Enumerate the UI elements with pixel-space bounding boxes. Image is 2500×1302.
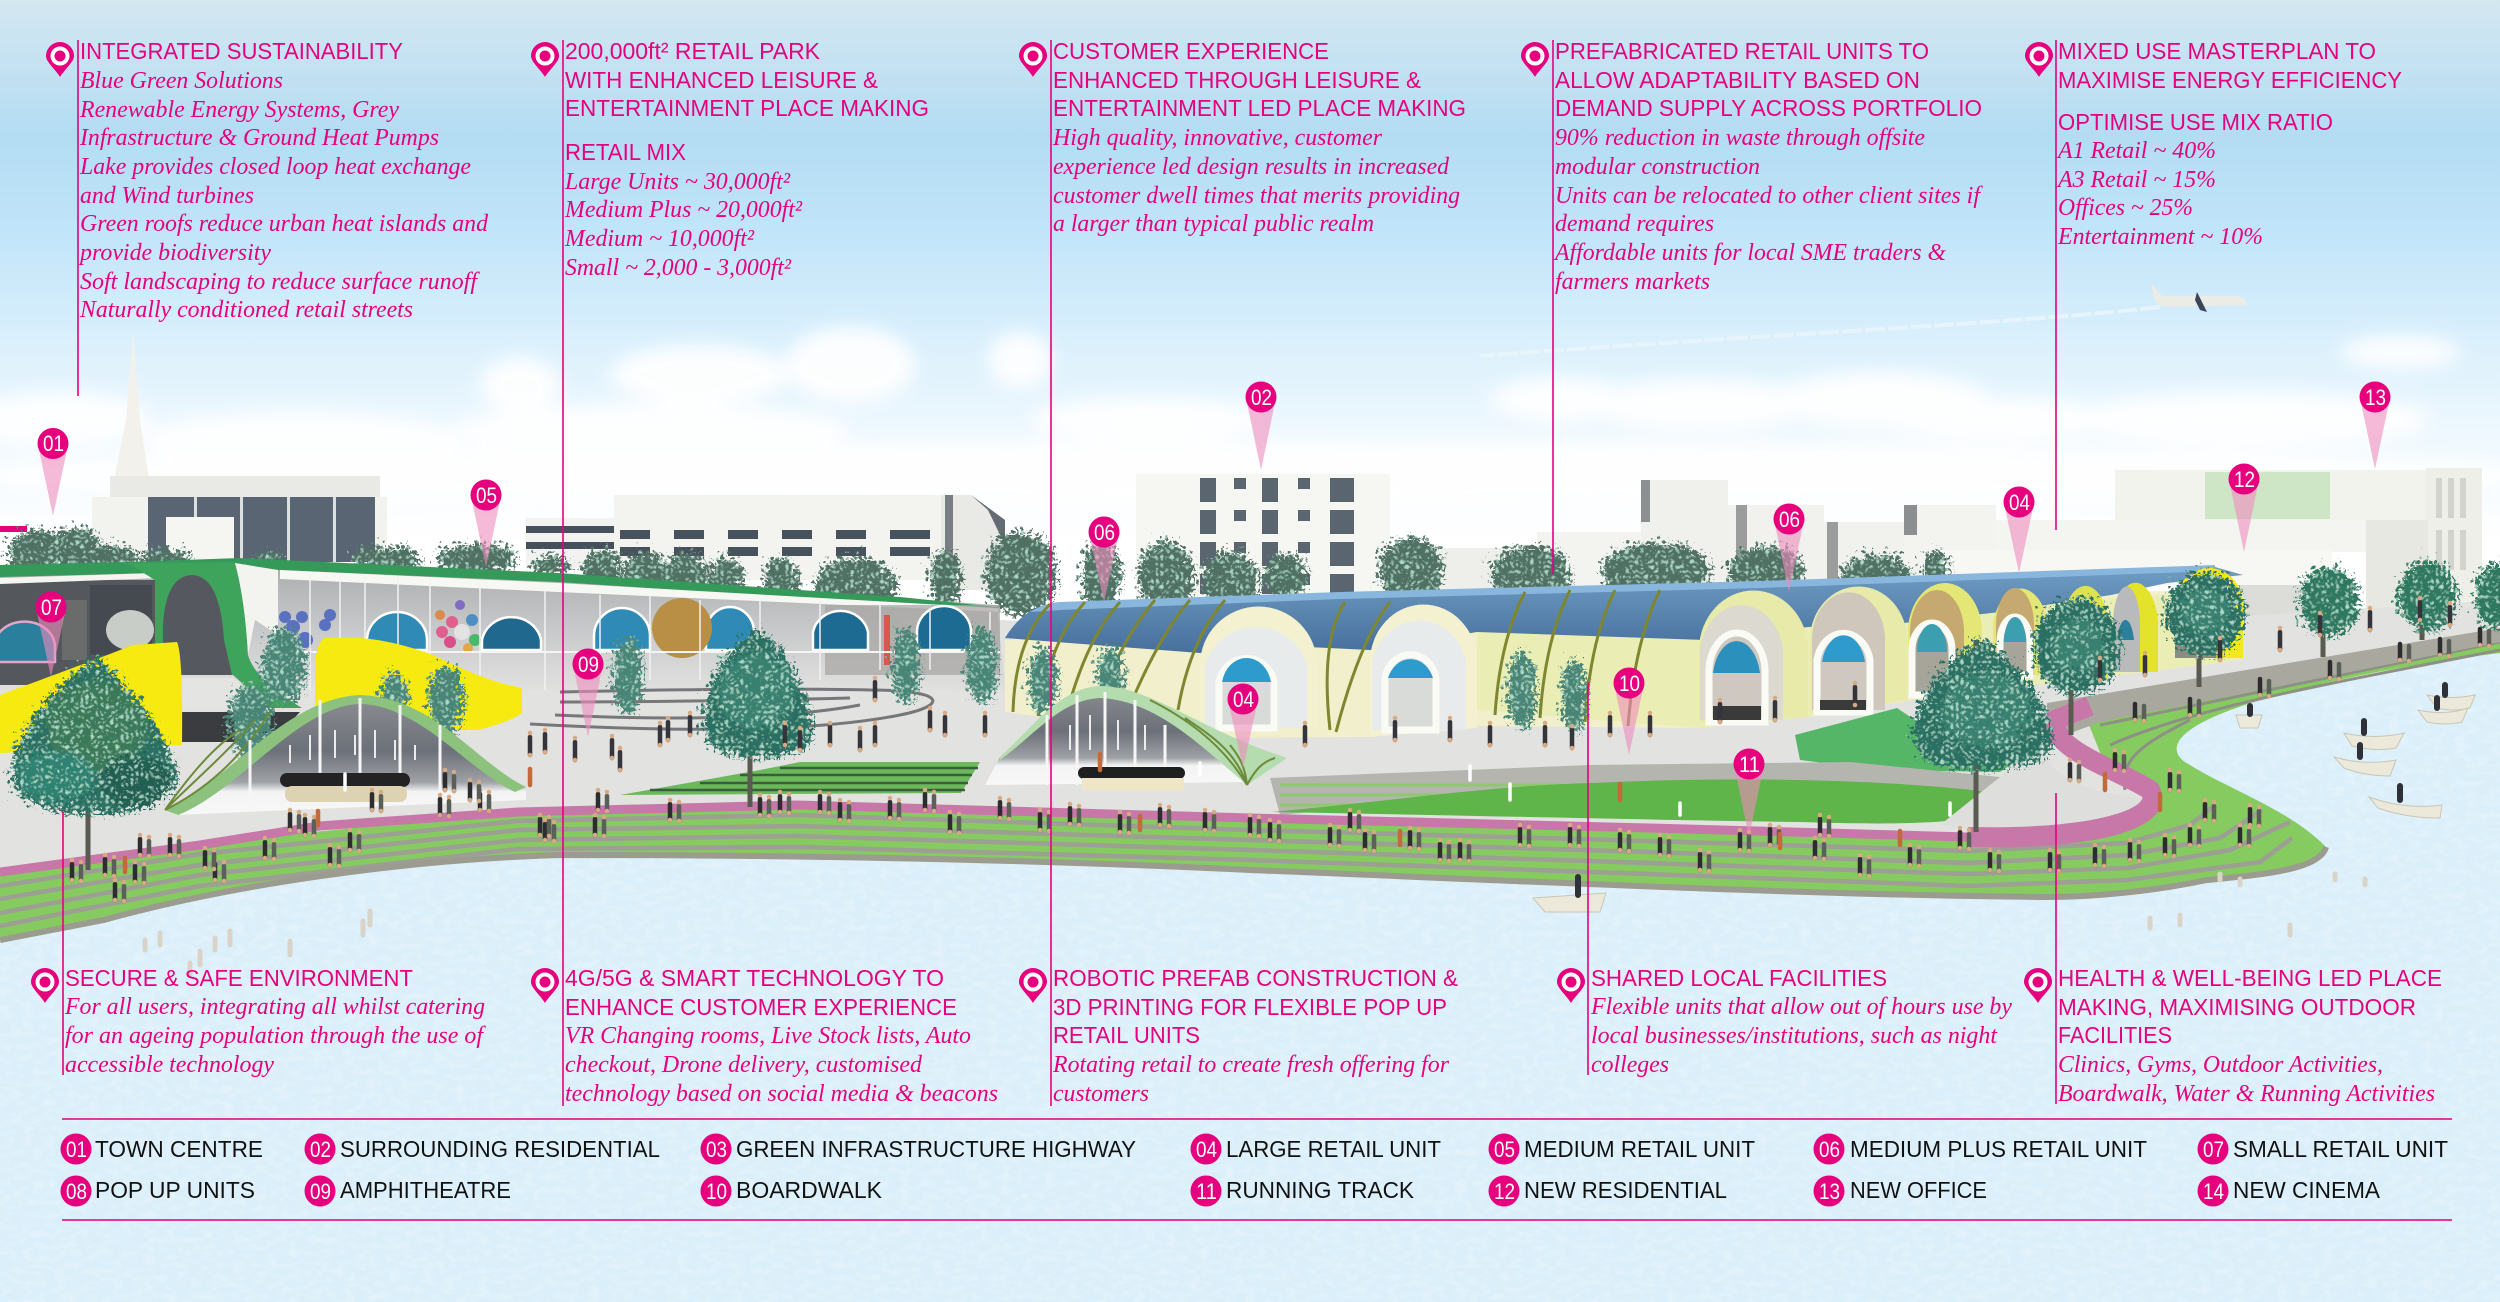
legend item 12 [1488,1176,1727,1206]
text block: Infrastructure & Ground Heat Pumps [79,125,439,151]
icon: location pin [1019,42,1047,77]
heading: ENHANCED THROUGH LEISURE & [1053,67,1421,93]
boats [1533,685,2475,912]
panel: mixed use masterplan [2025,38,2402,250]
map pin 07: 07 [41,595,62,620]
airplane and contrail [1480,284,2247,356]
legend item 08 [60,1176,255,1206]
legend item 06: 06 [1819,1137,1840,1162]
heading: MIXED USE MASTERPLAN TO [2058,38,2376,64]
text block [1052,125,1460,237]
panel: secure and safe environment [31,965,486,1078]
heading: MAXIMISE ENERGY EFFICIENCY [2058,67,2402,93]
clouds [0,327,2500,509]
legend item 09: 09 [310,1179,331,1204]
text block: Rotating retail to create fresh offering for [1052,1052,1450,1078]
legend item 13 [1814,1176,1987,1206]
text block [1052,1052,1450,1107]
heading: ALLOW ADAPTABILITY BASED ON [1555,67,1920,93]
boardwalk retaining wall [1270,762,2010,815]
map pin 02: 02 [1251,385,1272,410]
heading [565,965,957,1020]
text block: modular construction [1555,154,1760,180]
text block: local businesses/institutions, such as night [1591,1023,1998,1049]
text block: Medium Plus ~ 20,000ft² [564,197,803,223]
text block: Offices ~ 25% [2058,195,2193,221]
legend item 01 [60,1134,263,1164]
text block: provide biodiversity [78,240,271,266]
hall shopfront blue arches [1219,617,2030,730]
panel: shared local facilities [1557,965,2012,1078]
heading: MAKING, MAXIMISING OUTDOOR [2058,994,2416,1020]
legend item 05: 05 [1494,1137,1515,1162]
pavilion, right [985,686,1287,790]
heading: PREFABRICATED RETAIL UNITS TO [1555,38,1929,64]
legend item 11: RUNNING TRACK [1226,1177,1415,1203]
ramp green roof [1795,708,2040,772]
text block: Units can be relocated to other client sites if [1555,183,1983,209]
background buildings, tall residential block [1136,474,1390,604]
subheading: OPTIMISE USE MIX RATIO [2058,109,2333,135]
heading: FACILITIES [2058,1022,2172,1048]
map pin 07 [36,592,66,677]
background buildings, right [1400,468,2482,665]
legend item 09: AMPHITHEATRE [340,1177,511,1203]
vertical leader lines [63,40,2056,1106]
text block: For all users, integrating all whilst catering [64,994,485,1020]
map pin 06 right [1774,504,1804,592]
text block: customer dwell times that merits providing [1053,183,1460,209]
heading: ENHANCE CUSTOMER EXPERIENCE [565,994,957,1020]
text block: Soft landscaping to reduce surface runoff [80,269,480,295]
map pin 06 right: 06 [1779,507,1800,532]
heading: DEMAND SUPPLY ACROSS PORTFOLIO [1555,95,1982,121]
map pin 09 [572,648,604,737]
icon: location pin [531,42,559,77]
icon: location pin [46,42,74,77]
panel: integrated sustainability [46,38,489,323]
legend item 02: 02 [310,1137,331,1162]
text block: Entertainment ~ 10% [2057,224,2263,250]
panel: health and well-being [2024,965,2442,1107]
amphitheatre curved seating [530,689,933,729]
map pin 05: 05 [476,483,497,508]
heading: 3D PRINTING FOR FLEXIBLE POP UP [1053,994,1447,1020]
panel: robotic prefab construction [1019,965,1458,1107]
map pin 06 left [1088,516,1120,602]
text block: farmers markets [1555,269,1710,295]
text block [1553,125,1983,295]
glazing mullions [310,575,990,690]
map pin 13: 13 [2365,385,2386,410]
text block: Renewable Energy Systems, Grey [79,97,399,123]
map pin 04 lower [1228,684,1258,768]
text block: checkout, Drone delivery, customised [565,1052,923,1078]
heading: 4G/5G & SMART TECHNOLOGY TO [565,965,944,991]
panel: prefabricated units [1521,38,1983,295]
text block: Green roofs reduce urban heat islands and [80,211,489,237]
heading: RETAIL UNITS [1053,1022,1200,1048]
text block [1590,994,2012,1078]
legend item 13: NEW OFFICE [1850,1177,1987,1203]
text block: technology based on social media & beacons [565,1081,998,1107]
small plaza trees [223,622,1581,753]
legend item 11 [1190,1176,1415,1206]
map pin 01: 01 [43,431,64,456]
green terraced lake steps [0,640,2500,940]
hall walls [1005,590,2243,738]
text block: Large Units ~ 30,000ft² [564,169,791,195]
text block: VR Changing rooms, Live Stock lists, Auto [565,1023,971,1049]
text block: for an ageing population through the use of [65,1023,486,1049]
text block [2058,1052,2435,1107]
heading: ROBOTIC PREFAB CONSTRUCTION & [1053,965,1458,991]
foreground trees [5,555,2500,870]
yellow mound, right [315,638,522,730]
map pin 13 [2360,382,2390,469]
legend item 03: 03 [706,1137,727,1162]
legend item 14: NEW CINEMA [2233,1177,2381,1203]
legend item 10: 10 [706,1179,727,1204]
legend item 10: BOARDWALK [736,1177,883,1203]
background buildings, left [0,332,1005,590]
legend item 12: NEW RESIDENTIAL [1524,1177,1727,1203]
running track [0,706,2152,872]
legend item 04: LARGE RETAIL UNIT [1226,1136,1441,1162]
central green terrace steps [620,762,980,795]
text block [564,169,803,281]
heading: SHARED LOCAL FACILITIES [1591,965,1887,991]
hall roofs [1005,567,2243,653]
green archway [127,562,302,742]
icon: location pin [2024,968,2052,1003]
text block: and Wind turbines [80,183,254,209]
panel: smart technology [531,965,998,1107]
map pin 05 [470,480,502,567]
shopfront arches [0,606,971,662]
heading: HEALTH & WELL-BEING LED PLACE [2058,965,2442,991]
heading: WITH ENHANCED LEISURE & [565,67,878,93]
promenade wall [2047,628,2500,742]
text block: Affordable units for local SME traders & [1553,240,1946,266]
text block: Blue Green Solutions [80,68,283,94]
legend item 01: TOWN CENTRE [95,1136,263,1162]
pavilion, left [165,695,526,815]
icon: location pin [1557,968,1585,1003]
heading [1053,965,1458,1048]
heading: ENTERTAINMENT LED PLACE MAKING [1053,95,1466,121]
left retail building [0,558,1005,690]
text block [2056,138,2263,250]
legend item 07: SMALL RETAIL UNIT [2233,1136,2448,1162]
map pin 12: 12 [2234,467,2255,492]
text block: accessible technology [65,1052,274,1078]
panel: retail park [531,38,929,281]
map pin 01 [38,428,68,516]
text block [78,68,489,323]
legend item 11: 11 [1196,1179,1217,1204]
legend item 08: POP UP UNITS [95,1177,255,1203]
map pin 06 left: 06 [1094,520,1115,545]
text block: A1 Retail ~ 40% [2056,138,2216,164]
heading: ENTERTAINMENT PLACE MAKING [565,95,929,121]
legend item 02: SURROUNDING RESIDENTIAL [340,1136,660,1162]
legend item 06: MEDIUM PLUS RETAIL UNIT [1850,1136,2147,1162]
map pin 04 upper [2004,486,2034,573]
text block [565,1023,998,1107]
text block: customers [1053,1081,1149,1107]
text block: demand requires [1555,211,1714,237]
legend item 10 [700,1176,883,1206]
water [0,640,2500,1302]
text block: experience led design results in increased [1053,154,1450,180]
legend item 09 [304,1176,511,1206]
text block [64,994,486,1078]
promenade paving [1940,745,2155,838]
map pin 10: 10 [1619,671,1640,696]
heading: CUSTOMER EXPERIENCE [1053,38,1329,64]
legend item 08: 08 [66,1179,87,1204]
arched retail hall [1005,565,2243,738]
yellow mound, left [0,642,182,753]
icon: location pin [531,968,559,1003]
text block: Naturally conditioned retail streets [79,297,413,323]
text block: Small ~ 2,000 - 3,000ft² [565,255,792,281]
heading [2058,38,2402,93]
heading [1053,38,1466,121]
map pin 04 upper: 04 [2009,490,2030,515]
heading [565,38,929,121]
legend item 05: MEDIUM RETAIL UNIT [1524,1136,1755,1162]
heading [2058,965,2442,1048]
legend item 14: 14 [2203,1179,2224,1204]
text block: High quality, innovative, customer [1052,125,1383,151]
text block: Boardwalk, Water & Running Activities [2058,1081,2435,1107]
legend [60,1134,2448,1206]
map pin 11: 11 [1739,752,1760,777]
sky background [0,0,2500,735]
legend rules [62,1119,2452,1220]
icon: location pin [31,968,59,1003]
map pin 02 [1246,382,1276,470]
panel: customer experience [1019,38,1466,237]
icon: location pin [1521,42,1549,77]
legend item 12: 12 [1494,1179,1515,1204]
subheading: RETAIL MIX [565,139,686,165]
background tree line [2,521,1944,610]
hall gable frames [1200,568,2243,737]
text block: Flexible units that allow out of hours use by [1590,994,2012,1020]
map pin 10 [1614,668,1644,755]
map pin 04 lower: 04 [1233,687,1254,712]
legend item 14 [2198,1176,2381,1206]
terrace steps by the pavilion [1280,785,1580,805]
legend item 04: 04 [1196,1137,1217,1162]
heading: INTEGRATED SUSTAINABILITY [80,38,403,64]
text block: a larger than typical public realm [1053,211,1374,237]
people [72,596,2489,901]
icon: location pin [2025,42,2053,77]
icon: location pin [1019,968,1047,1003]
text block: colleges [1591,1052,1669,1078]
text block: Lake provides closed loop heat exchange [79,154,471,180]
land and plaza [0,600,2500,940]
heading [1555,38,1982,121]
text block: 90% reduction in waste through offsite [1555,125,1925,151]
lawn [1272,779,2013,823]
text block: Clinics, Gyms, Outdoor Activities, [2058,1052,2383,1078]
legend item 03: GREEN INFRASTRUCTURE HIGHWAY [736,1136,1136,1162]
map pin 09: 09 [578,652,599,677]
heading: SECURE & SAFE ENVIRONMENT [65,965,413,991]
swans [145,874,2365,975]
text block: Medium ~ 10,000ft² [564,226,755,252]
legend item 13: 13 [1819,1179,1840,1204]
map pin 12 [2228,464,2260,552]
map pin 11 [1734,748,1764,837]
legend item 07: 07 [2203,1137,2224,1162]
legend item 01: 01 [66,1137,87,1162]
text block: A3 Retail ~ 15% [2056,167,2216,193]
heading: 200,000ft² RETAIL PARK [565,38,821,64]
